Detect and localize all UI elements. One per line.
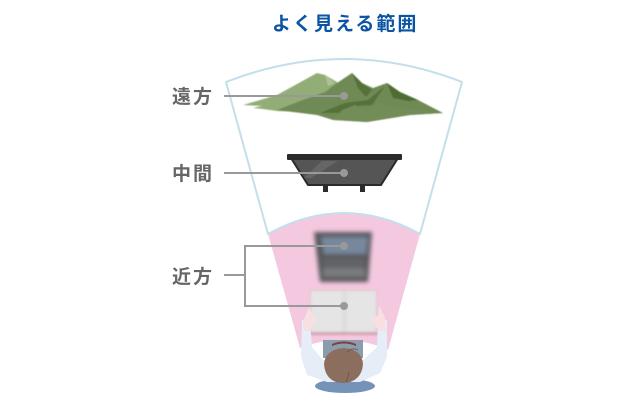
icon: blurred book: [309, 289, 378, 335]
hands: [303, 305, 386, 331]
panel: field of view outline: [226, 59, 462, 234]
label: middle: 中間: [172, 163, 214, 185]
label: near: 近方: [172, 265, 214, 288]
title: よく見える範囲: [272, 13, 418, 35]
arms and torso: [301, 320, 387, 382]
label: far: 遠方: [172, 85, 214, 108]
leader line: far: [224, 92, 348, 100]
icon: person seen from above: [301, 305, 387, 393]
cushion: [315, 379, 375, 393]
leader bracket: near: [224, 242, 348, 310]
leader line: middle: [224, 169, 348, 177]
panel: near vision zone: [268, 213, 420, 350]
icon: mountains: [243, 73, 443, 122]
head: [324, 348, 363, 383]
collar: [323, 340, 363, 358]
icon: monitor: [287, 154, 402, 192]
icon: blurred laptop: [314, 232, 372, 282]
